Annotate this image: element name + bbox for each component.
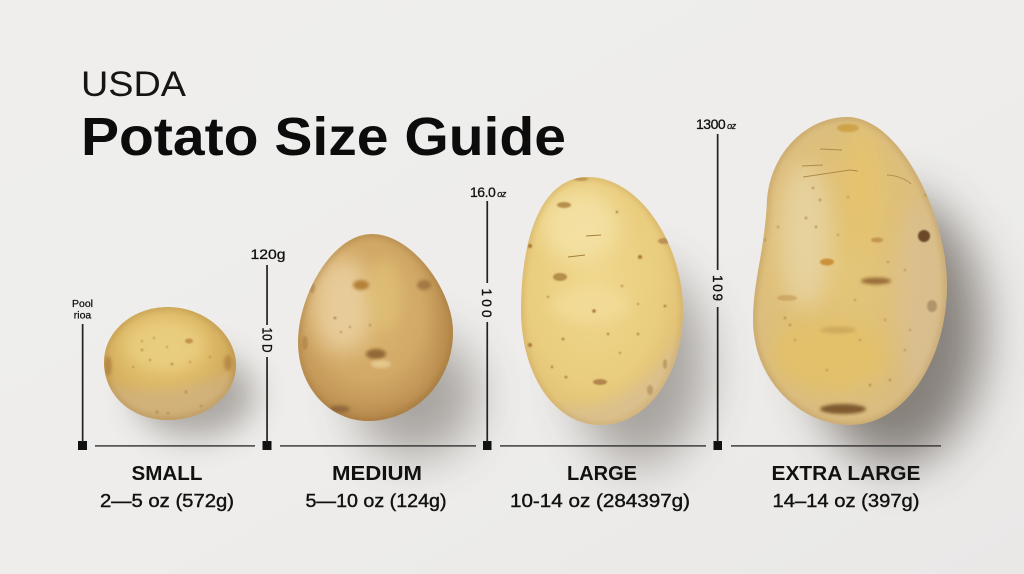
- height marker: extra large: [696, 116, 737, 442]
- label: extra large: 14–14 oz (397g): [772, 490, 920, 511]
- height marker: small: rioa: [74, 310, 91, 322]
- label: large: LARGE: [567, 463, 637, 485]
- label: small: SMALL: [132, 463, 202, 485]
- label: extra large: [772, 463, 920, 511]
- label: large: [510, 463, 690, 511]
- title: Potato Size Guide: Potato Size Guide: [81, 107, 566, 167]
- potato: large: [521, 177, 690, 430]
- potato: medium: [298, 234, 460, 430]
- height marker: large: [470, 184, 507, 442]
- label: large: 10-14 oz (284397g): [510, 490, 690, 511]
- label: extra large: EXTRA LARGE: [772, 463, 920, 485]
- potato: small: [100, 307, 236, 425]
- height marker: large: 16.0oz: [470, 184, 507, 200]
- label: small: [100, 463, 234, 511]
- height marker: medium: 10 D: [260, 328, 274, 353]
- title: USDA: USDA: [81, 65, 187, 104]
- height marker: medium: [250, 246, 286, 442]
- label: small: 2—5 oz (572g): [100, 490, 234, 511]
- potato: extra large: [753, 117, 947, 425]
- height marker: large: 100: [479, 288, 494, 318]
- height marker: medium: 120g: [250, 246, 286, 262]
- height marker: small: Pool: [72, 298, 93, 310]
- height marker: small: [72, 298, 93, 442]
- height marker: extra large: 109: [710, 275, 725, 301]
- potato shadows: [135, 195, 983, 465]
- label: medium: [306, 463, 446, 511]
- label: medium: MEDIUM: [332, 463, 422, 485]
- label: medium: 5—10 oz (124g): [306, 490, 446, 511]
- height marker: extra large: 1300oz: [696, 116, 737, 132]
- baseline ruler: [78, 441, 941, 450]
